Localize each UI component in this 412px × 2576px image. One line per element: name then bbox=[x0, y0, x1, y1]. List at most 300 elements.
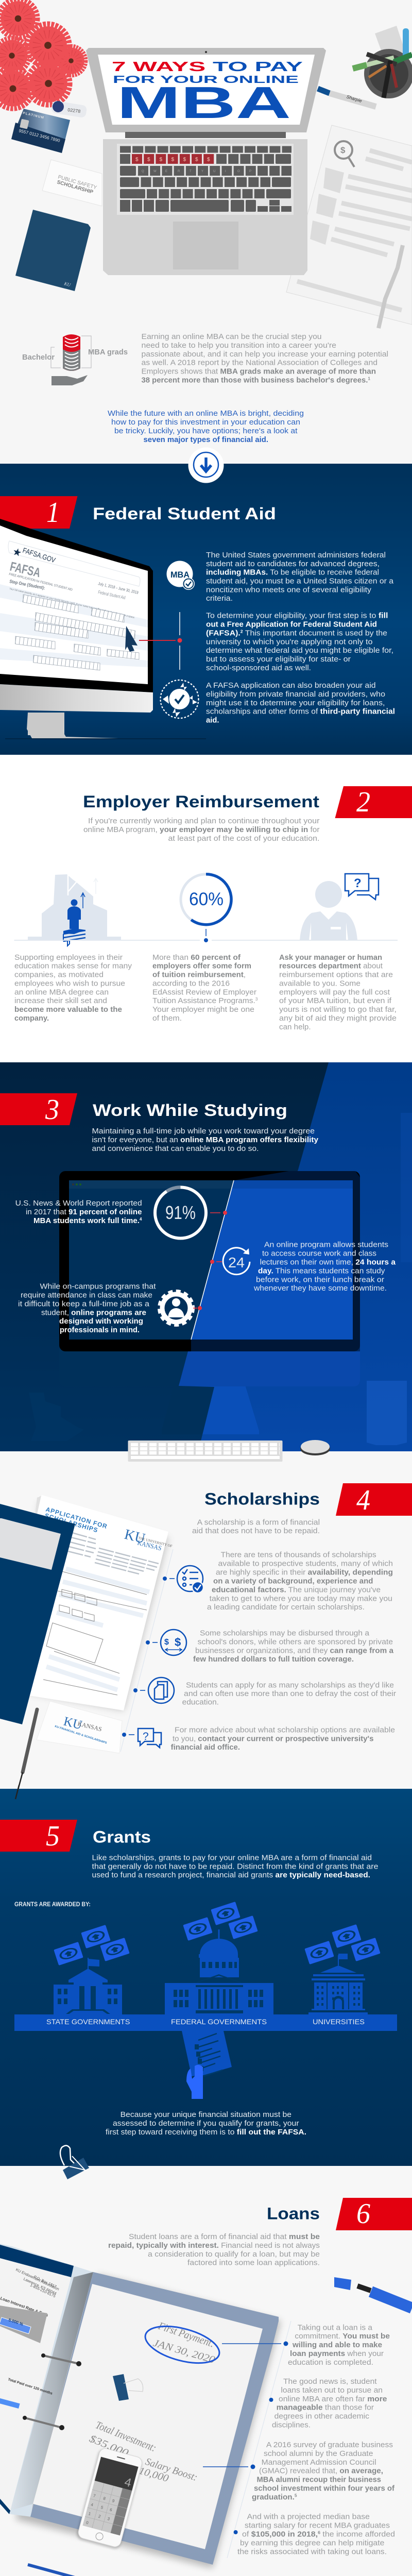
text: column 2: according to the 2016 bbox=[152, 980, 230, 988]
illustration: desktop monitor with FAFSA form: FAFSA.GOV bbox=[22, 546, 57, 564]
illustration: open binder with notes: Loan Interest Rate & Fees bbox=[0, 2296, 49, 2318]
text: apply for many: education. bbox=[182, 1699, 219, 1707]
illustration: KU financial aid card and pen: KU FINANCIAL AID & SCHOLARSHIPS bbox=[54, 1725, 107, 1745]
chart: 91 percent ring: 91% bbox=[165, 1202, 196, 1223]
keys: letters: QWERTYUIOP bbox=[142, 170, 251, 173]
illustration: laptop bbox=[86, 48, 326, 275]
text: column 1: become more valuable to the bbox=[14, 1006, 122, 1014]
text: fill out the FAFSA: first step toward receiving them is to fill out the FAFSA. bbox=[106, 2128, 306, 2137]
text: column 3: yours is not willing to go that far, bbox=[279, 1006, 397, 1014]
illustration: desktop monitor with FAFSA form: ★ bbox=[11, 546, 23, 559]
panel: tax credit for education bbox=[0, 2565, 412, 2576]
text: GMAC survey: school alumni by the Graduate bbox=[264, 2450, 373, 2458]
illustration: marker bbox=[318, 89, 376, 107]
connector: first payment bbox=[222, 2341, 288, 2346]
text: transition paragraph: seven major types of financial aid. bbox=[143, 436, 268, 444]
text: column 1: education makes sense for many bbox=[14, 962, 132, 971]
text: tens of thousands: are highly specific in their availability, depending bbox=[216, 1569, 393, 1577]
text: tens of thousands: There are tens of thousands of scholarships bbox=[221, 1551, 376, 1560]
illustration: scholarship card: PUBLIC SAFETY bbox=[57, 174, 97, 191]
icon: 24 hour clock: 24 bbox=[228, 1255, 245, 1270]
text: tens of thousands: on a variety of background, experience and bbox=[213, 1577, 373, 1585]
text: column 3: employers will pay the full cost bbox=[279, 988, 390, 996]
text: column 2: 3 bbox=[255, 997, 258, 1002]
illustration: total investment note: Salary Boost: bbox=[144, 2456, 199, 2483]
text: federal aid paragraph 1: criteria. bbox=[206, 595, 233, 603]
text: grants intro: used to fund a research project, financial aid grants are typically need-based. bbox=[92, 1871, 370, 1879]
heading: scholarships: Scholarships bbox=[204, 1490, 320, 1509]
labels: awarding bodies: UNIVERSITIES bbox=[313, 2018, 365, 2026]
ribbon: number 5 bbox=[0, 1820, 77, 1852]
text: federal aid paragraph 1: The United States government administers federal bbox=[206, 551, 386, 560]
text: 24 hours: whenever they have some downtime. bbox=[253, 1284, 387, 1293]
label: Bachelor: Bachelor bbox=[22, 353, 55, 362]
labels: awarding bodies: STATE GOVERNMENTS bbox=[46, 2018, 130, 2026]
text: federal aid paragraph 3: eligibility from private financial aid providers, who bbox=[206, 690, 385, 699]
icon: MBA with check bbox=[167, 561, 195, 590]
illustration: total investment note bbox=[88, 2418, 199, 2484]
text: column 1: companies, as motivated bbox=[14, 971, 104, 979]
icon: checklist bbox=[163, 1566, 203, 1593]
text: grants intro bbox=[92, 1854, 378, 1879]
illustration: KU financial aid card and pen: KU bbox=[62, 1715, 83, 1733]
illustration: scholarship application and folder: SCHOLARSHIPS bbox=[44, 1512, 99, 1534]
text: 91 percent: 4 bbox=[140, 1217, 142, 1222]
text: transition paragraph: While the future with an online MBA is bright, deciding bbox=[108, 410, 304, 418]
text: GMAC survey: (GMAC) revealed that, on average, bbox=[259, 2467, 383, 2476]
text: column 2: of tuition reimbursement , bbox=[152, 971, 246, 979]
text: column 2: Your employer might be one bbox=[152, 1006, 254, 1014]
dot: salary bbox=[234, 2530, 238, 2534]
text: transition paragraph bbox=[108, 410, 304, 444]
text: disbursed: Some scholarships may be disbursed through a bbox=[200, 1629, 370, 1637]
text: intro paragraph: 1 bbox=[368, 376, 371, 381]
illustration: pedometer bbox=[51, 100, 87, 118]
illustration: KU financial aid card and pen bbox=[15, 1701, 122, 1799]
text: scholarship intro: A scholarship is a form of financial bbox=[197, 1518, 320, 1527]
text: loans intro: repaid, typically with interest. Financial need is not always bbox=[108, 2242, 320, 2250]
text: good news: The good news is, student bbox=[283, 2378, 377, 2386]
illustration: building with climbing employee bbox=[28, 874, 121, 946]
text: column 1: increase their skill set and bbox=[14, 997, 107, 1005]
panel: employer reimbursement bbox=[0, 755, 412, 1062]
text: grants intro: Like scholarships, grants to pay for your online MBA are a form of financial aid bbox=[92, 1854, 372, 1862]
text: commitment: education is completed. bbox=[288, 2359, 373, 2367]
illustration: open binder with notes bbox=[0, 2244, 281, 2568]
text: column 1: Supporting employees in their bbox=[14, 954, 123, 962]
text: column 3: available to you. Some bbox=[279, 980, 360, 988]
illustration: pencil cup bbox=[353, 26, 412, 98]
icons: tuition bills bbox=[54, 1902, 381, 1965]
text: more advice: For more advice about what scholarship options are available bbox=[175, 1726, 395, 1734]
chart: 60 percent ring bbox=[181, 874, 231, 942]
text: column 1: an online MBA degree can bbox=[14, 988, 109, 996]
illustration: scholarship card bbox=[42, 160, 102, 206]
text: tens of thousands bbox=[207, 1551, 393, 1612]
illustration: phone calculator: 5 bbox=[100, 2505, 104, 2510]
text: tens of thousands: available to prospective students, many of which bbox=[218, 1560, 393, 1568]
text: federal aid paragraph 3: scholarships and other forms of third-party financial bbox=[206, 708, 395, 716]
ribbon: number 5: 5 bbox=[46, 1820, 60, 1852]
text: tens of thousands: a leading candidate for certain scholarships. bbox=[207, 1603, 365, 1612]
text: median salary: And with a projected median base bbox=[247, 2513, 370, 2521]
illustration: mouse bbox=[300, 1440, 330, 1455]
text: GMAC survey: Management Admission Council bbox=[262, 2459, 376, 2467]
illustration: binder clip on top bbox=[60, 2145, 89, 2179]
text: intro paragraph: Earning an online MBA can be the crucial step you bbox=[141, 333, 321, 341]
illustration: phone calculator: 6 bbox=[109, 2507, 113, 2513]
ribbon: number 4 bbox=[336, 1483, 412, 1516]
text: federal aid paragraph 2: This important document is used by the bbox=[243, 630, 387, 638]
text: intro paragraph bbox=[141, 333, 388, 384]
illustration: rocking horse silhouette bbox=[29, 1393, 84, 1441]
text: column 1: employees who wish to pursue bbox=[14, 980, 125, 988]
title on laptop screen bbox=[112, 59, 303, 128]
illustration: scholarship application and folder: APPLICATION FOR bbox=[45, 1505, 108, 1530]
icon: cursor with connector bbox=[125, 612, 182, 670]
illustration: form held by hand bbox=[182, 2020, 232, 2099]
text: loans intro: Student loans are a form of financial aid that must be bbox=[129, 2233, 320, 2241]
text: on-campus vs online bbox=[18, 1283, 156, 1334]
text: median salary bbox=[237, 2513, 395, 2556]
ribbon: number 6: 6 bbox=[356, 2198, 370, 2230]
text: column 3: reimbursement options that are bbox=[279, 971, 393, 979]
icon: coin stack with hand bbox=[51, 334, 91, 385]
illustration: paper document: $ bbox=[340, 145, 346, 155]
chart: 91 percent ring bbox=[155, 1187, 227, 1239]
text: good news: loans taken out to pursue an bbox=[281, 2386, 383, 2395]
text: commitment bbox=[288, 2324, 390, 2367]
text: tens of thousands: taken to get to where you are today may make you bbox=[210, 1595, 392, 1603]
text: federal aid paragraph 2: determine what federal aid you might be eligible for, bbox=[206, 647, 393, 655]
panel: scholarships bbox=[0, 1440, 412, 1799]
illustration: total investment note: Total Investment: bbox=[94, 2418, 158, 2454]
text: 24 hours bbox=[253, 1241, 396, 1293]
text: federal aid paragraph 2: university to which you're applying not only to bbox=[206, 638, 373, 646]
text: good news: degrees in other academic bbox=[274, 2413, 369, 2421]
illustration: keyboard bbox=[128, 1440, 282, 1462]
illustration: credit card bbox=[11, 109, 70, 153]
heading: loans: Loans bbox=[267, 2205, 320, 2223]
text: federal aid paragraph 3: A FAFSA application can also broaden your aid bbox=[206, 682, 376, 690]
ribbon: number 1: 1 bbox=[46, 497, 60, 529]
illustration: desktop monitor with FAFSA form: FAFSA bbox=[9, 560, 42, 580]
text: work intro: and convenience that can enable you to do so. bbox=[92, 1145, 259, 1153]
illustration: desktop monitor with FAFSA form: July 1, 2018 – June 30, 2019 bbox=[98, 581, 139, 595]
illustration: total investment note: $35,000 bbox=[88, 2433, 130, 2459]
text: more advice: to you, contact your current or prospective university's bbox=[173, 1735, 374, 1743]
illustration: scholarship application and folder: KANSAS bbox=[136, 1538, 162, 1552]
text: good news bbox=[272, 2378, 387, 2430]
illustration: circled first payment note: First Payment: bbox=[157, 2319, 216, 2350]
text: 24 hours: to access course work and class bbox=[262, 1250, 376, 1258]
heading: grants: Grants bbox=[93, 1828, 151, 1846]
illustration: pedometer: 02278 bbox=[67, 107, 81, 114]
text: work intro: Maintaining a full-time job while you work toward your degree bbox=[92, 1127, 315, 1136]
text: column 2 bbox=[152, 954, 258, 1023]
text: intro paragraph: as well. A 2018 report by the National Association of Colleges and bbox=[141, 359, 377, 367]
text: federal aid paragraph 2: 2 bbox=[241, 630, 243, 634]
illustration: phone calculator: 2 bbox=[98, 2514, 101, 2519]
illustration: marker: Sharpie bbox=[346, 94, 363, 104]
text: on-campus vs online: require attendance in class can make bbox=[21, 1292, 152, 1300]
keys: seven red dollar keys: $$$$$$$ bbox=[135, 157, 210, 163]
illustration: phone calculator: 4 bbox=[90, 2502, 94, 2507]
text: column 2: of them. bbox=[152, 1014, 182, 1023]
illustration: scholarship application and folder: THE UNIVERSITY OF bbox=[138, 1536, 173, 1548]
illustration: credit card: 9557 0112 3456 7890 bbox=[19, 128, 61, 143]
text: federal aid paragraph 2 bbox=[206, 612, 393, 672]
text: federal aid paragraph 1: student aid to candidates for advanced degrees, bbox=[206, 560, 380, 568]
text: loans intro: factored into some loan applications. bbox=[187, 2259, 320, 2267]
illustration: open binder with notes: Lawrence, KS 66044 bbox=[23, 2277, 57, 2296]
text: GMAC survey bbox=[252, 2441, 394, 2501]
title on laptop screen: FOR YOUR ONLINE bbox=[113, 74, 299, 86]
text: median salary: by earning this degree can help mitigate bbox=[240, 2539, 384, 2547]
text: work intro bbox=[92, 1127, 318, 1153]
illustration: flowers bbox=[0, 0, 86, 109]
text: commitment: Taking out a loan is a bbox=[298, 2324, 373, 2332]
panel: grants bbox=[0, 1785, 412, 2166]
text: federal aid paragraph 2: To determine your eligibility, your first step is to fill bbox=[206, 612, 388, 620]
illustration: desktop monitor with FAFSA form: Federal Student Aid bbox=[98, 589, 126, 600]
illustration: scholarship card: SCHOLARSHIP bbox=[56, 179, 94, 195]
icon: dollar range: $ bbox=[164, 1638, 169, 1647]
ribbon: number 2: 2 bbox=[356, 786, 370, 818]
illustration: phone calculator: 3 bbox=[107, 2516, 111, 2521]
text: federal aid paragraph 2: out a Free Application for Federal Student Aid bbox=[206, 620, 377, 629]
illustration: binder clip on page bbox=[113, 2374, 143, 2401]
text: intro paragraph: 38 percent more than those with business bachelor's degrees. bbox=[141, 376, 368, 384]
text: column 2: EdAssist Review of Employer bbox=[152, 988, 256, 996]
text: employer intro: at least part of the cost of your education. bbox=[168, 835, 319, 843]
text: federal aid paragraph 2: (FAFSA). bbox=[206, 630, 241, 638]
text: 24 hours: lectures on their own time, 24 hours a bbox=[260, 1258, 396, 1266]
ribbon: number 1 bbox=[0, 496, 77, 529]
text: median salary: the risks associated with taking out loans. bbox=[237, 2548, 387, 2556]
text: employer intro: online MBA program, your employer may be willing to chip in for bbox=[83, 826, 320, 834]
panel: loans bbox=[0, 2145, 412, 2576]
text: 24 hours: An online program allows students bbox=[264, 1241, 388, 1249]
text: disbursed: businesses or organizations, and they can range from a bbox=[195, 1647, 394, 1655]
text: apply for many bbox=[182, 1681, 396, 1707]
heading: work while studying: Work While Studying bbox=[93, 1101, 287, 1120]
text: good news: online MBA are often far more bbox=[279, 2395, 387, 2403]
heading: employer reimbursement: Employer Reimbursement bbox=[83, 792, 319, 811]
text: 91 percent: in 2017 that 91 percent of online bbox=[26, 1208, 142, 1216]
illustration: scholarship application and folder bbox=[0, 1495, 173, 1724]
text: on-campus vs online: designed with working bbox=[59, 1317, 143, 1326]
ribbon: number 2 bbox=[335, 786, 412, 818]
panel: federal student aid bbox=[0, 464, 412, 755]
illustration: big monitor bbox=[59, 1171, 360, 1434]
connector: phone bbox=[203, 2465, 255, 2469]
icon: MBA with check: MBA bbox=[170, 570, 190, 580]
illustration: desktop monitor with FAFSA form: Your full name (exactly as it appears on your Social Security card). If your name has a suffix, such as Jr. or III, include a space. bbox=[9, 587, 135, 619]
illustration: desktop monitor with FAFSA form bbox=[0, 519, 206, 739]
text: federal aid paragraph 2: but to assess your eligibility for state- or bbox=[206, 655, 351, 664]
illustration: credit card: PLATINUM bbox=[23, 111, 45, 120]
illustration: paper document bbox=[286, 125, 412, 325]
illustration: manager with question bubble: ? bbox=[354, 876, 362, 890]
text: disbursed: school's donors, while others are sponsored by private bbox=[198, 1638, 393, 1646]
text: GMAC survey: graduation. bbox=[252, 2493, 295, 2501]
icon: dollar range bbox=[146, 1630, 186, 1655]
dot: good news bbox=[269, 2398, 273, 2402]
baseline rule bbox=[14, 940, 398, 941]
text: federal aid paragraph 2: school-sponsored aid as well. bbox=[206, 664, 311, 672]
icon: chat bubble: ? bbox=[143, 1731, 149, 1742]
illustration: phone calculator: 9 bbox=[112, 2498, 115, 2503]
illustration: circled first payment note bbox=[141, 2319, 224, 2370]
text: on-campus vs online: it difficult to keep a full-time job as a bbox=[18, 1300, 150, 1309]
title on laptop screen: 7 WAYS TO PAY bbox=[112, 59, 303, 74]
label: grants are awarded by: GRANTS ARE AWARDED BY: bbox=[14, 1902, 91, 1908]
text: 24 hours: before work, on their lunch break or bbox=[256, 1276, 384, 1284]
text: employer intro bbox=[83, 817, 320, 843]
illustration: circled first payment note: JAN 30, 2020 bbox=[152, 2337, 216, 2366]
text: column 2: Tuition Assistance Programs. bbox=[152, 997, 249, 1005]
text: more advice: financial aid office. bbox=[171, 1743, 240, 1752]
illustration: phone calculator bbox=[75, 2447, 144, 2550]
text: good news: disciplines. bbox=[272, 2421, 311, 2430]
text: column 1: company. bbox=[14, 1014, 49, 1023]
panel: work while studying bbox=[0, 1062, 412, 1451]
illustration: desktop monitor with FAFSA form: Step One (Student): bbox=[9, 579, 45, 590]
text: commitment: loan payments when your bbox=[290, 2350, 384, 2358]
text: commitment: commitment. You must be bbox=[295, 2332, 390, 2341]
text: column 2: employers offer some form bbox=[152, 962, 251, 971]
icon: gear with worker bbox=[159, 1291, 202, 1325]
illustration: mug silhouette bbox=[367, 1381, 407, 1445]
timeline rule bbox=[121, 1549, 173, 1752]
text: apply for many: and can often use more than one to defray the cost of their bbox=[184, 1690, 396, 1698]
text: GMAC survey: MBA alumni recoup their business bbox=[256, 2476, 381, 2484]
text: fill out the FAFSA: assessed to determine if you qualify for grants, your bbox=[113, 2120, 299, 2128]
text: transition paragraph: be tricky. Luckily, you have options; here's a look at bbox=[114, 427, 298, 435]
text: column 2: More than 60 percent of bbox=[152, 954, 241, 962]
panel: top arrow badge bbox=[188, 447, 224, 483]
text: GMAC survey: A 2016 survey of graduate business bbox=[266, 2441, 393, 2449]
text: median salary: the income afforded bbox=[320, 2530, 395, 2538]
illustration: blue marker bbox=[334, 2277, 412, 2308]
illustration: manager with question bubble bbox=[300, 874, 379, 940]
text: federal aid paragraph 1: including MBAs. To be eligible to receive federal bbox=[206, 569, 379, 577]
ribbon: number 6 bbox=[336, 2198, 412, 2230]
slanted timeline rule bbox=[227, 2321, 291, 2558]
text: tens of thousands: educational factors. The unique journey you've bbox=[212, 1586, 381, 1594]
text: median salary: 6 bbox=[318, 2530, 321, 2535]
label: MBA grads: MBA grads bbox=[88, 348, 128, 357]
icon: dollar range: $ bbox=[175, 1636, 181, 1649]
text: column 1 bbox=[14, 954, 132, 1023]
text: median salary: of $105,000 in 2018, bbox=[242, 2530, 312, 2538]
text: column 3: can help. bbox=[279, 1023, 311, 1031]
bar: awarders band bbox=[14, 2014, 397, 2031]
text: more advice bbox=[171, 1726, 395, 1752]
illustration: open binder with notes: KU Endowment Association bbox=[15, 2267, 60, 2292]
text: grants intro: that generally do not have to be repaid. Distinct from the kind of grants that are bbox=[92, 1862, 378, 1871]
text: GMAC survey: 5 bbox=[295, 2493, 297, 2498]
icon: chat bubble bbox=[122, 1728, 161, 1748]
illustration: scholarship application and folder: KU bbox=[123, 1527, 147, 1547]
text: good news: manageable than those for bbox=[277, 2404, 374, 2412]
labels: awarding bodies: FEDERAL GOVERNMENTS bbox=[171, 2018, 267, 2026]
text: on-campus vs online: student, online programs are bbox=[41, 1309, 146, 1317]
illustration: open binder with notes: 5.000 % bbox=[8, 2317, 24, 2327]
text: 91 percent bbox=[15, 1199, 142, 1225]
illustration: open binder with notes: 1-855-210-8175 bbox=[29, 2283, 56, 2298]
text: federal aid paragraph 1: student aid, you must be a United States citizen or a bbox=[206, 577, 394, 585]
illustration: phone calculator: 0 bbox=[85, 2520, 89, 2526]
illustration: navy notebook bbox=[15, 210, 91, 291]
text: federal aid paragraph 3: might use it to determine your eligibility for loans, bbox=[206, 699, 385, 707]
heading: federal student aid: Federal Student Aid bbox=[93, 504, 276, 523]
illustration: open binder with notes: P.O. Box 1817 bbox=[33, 2275, 57, 2289]
icon: documents bbox=[133, 1677, 174, 1703]
illustration: pencil bbox=[28, 2565, 140, 2576]
text: fill out the FAFSA bbox=[106, 2111, 306, 2137]
pen tip overlap bbox=[15, 1785, 19, 1799]
text: transition paragraph: how to pay for this investment in your education can bbox=[111, 418, 300, 427]
text: column 3: resources department about bbox=[279, 962, 383, 971]
illustration: state government bbox=[54, 1958, 122, 2014]
icon: 24 hour clock bbox=[210, 1248, 250, 1275]
text: work intro: isn't for everyone, but an online MBA program offers flexibility bbox=[92, 1136, 318, 1144]
illustration: KU financial aid card and pen: KANSAS bbox=[77, 1720, 102, 1733]
text: GMAC survey: school investment within four years of bbox=[254, 2485, 394, 2493]
panel: hero desk bbox=[0, 0, 412, 464]
text: column 3: of your MBA tuition, but even if bbox=[279, 997, 392, 1005]
illustration: phone calculator: 7 bbox=[93, 2494, 96, 2499]
illustration: university bbox=[308, 1954, 368, 2014]
illustration: total investment note: $10,000 bbox=[132, 2464, 170, 2484]
text: column 3 bbox=[279, 954, 397, 1031]
text: commitment: willing and able to make bbox=[292, 2341, 382, 2349]
illustration: pen on document bbox=[379, 245, 403, 328]
illustration: phone calculator: 8 bbox=[102, 2496, 107, 2501]
text: federal aid paragraph 3: aid. bbox=[206, 716, 219, 724]
text: scholarship intro: aid that does not have to be repaid. bbox=[192, 1527, 320, 1535]
text: column 3: any bit of aid they might provide bbox=[279, 1014, 397, 1023]
illustration: navy notebook: KU bbox=[63, 281, 72, 287]
text: disbursed bbox=[193, 1629, 394, 1664]
text: loans intro: a consideration to qualify for a loan, but may be bbox=[148, 2250, 320, 2259]
text: federal aid paragraph 3 bbox=[206, 682, 395, 724]
title on laptop screen: MBA bbox=[117, 78, 291, 128]
ribbon: number 3: 3 bbox=[45, 1094, 59, 1126]
text: intro paragraph: Employers shows that MBA grads make an average of more than bbox=[141, 368, 376, 376]
text: loans intro bbox=[108, 2233, 320, 2267]
text: 91 percent: U.S. News & World Report reported bbox=[15, 1199, 142, 1208]
text: intro paragraph: passionate about, and it can help you increase your earning potential bbox=[141, 350, 388, 359]
text: median salary: starting salary for recent MBA graduates bbox=[245, 2521, 390, 2530]
text: federal aid paragraph 1: noncitizen who meets one of several eligibility bbox=[206, 586, 372, 595]
text: scholarship intro bbox=[192, 1518, 320, 1535]
icon: dotted circle with arrows bbox=[161, 680, 199, 718]
illustration: desktop monitor with FAFSA form: FREE APPLICATION for FEDERAL STUDENT AID bbox=[9, 572, 73, 592]
ribbon: number 4: 4 bbox=[356, 1484, 370, 1516]
text: federal aid paragraph 1 bbox=[206, 551, 394, 603]
text: on-campus vs online: While on-campus programs that bbox=[40, 1283, 156, 1291]
text: intro paragraph: need to take to help you transition into a career you're bbox=[141, 342, 336, 350]
illustration: phone calculator: 1 bbox=[88, 2511, 92, 2516]
chart: 60 percent ring: 60% bbox=[189, 889, 224, 909]
text: 91 percent: MBA students work full time. bbox=[33, 1217, 140, 1225]
text: 24 hours: day. This means students can study bbox=[258, 1267, 385, 1276]
text: fill out the FAFSA: Because your unique financial situation must be bbox=[121, 2111, 291, 2119]
illustration: federal government bbox=[165, 1929, 273, 2014]
